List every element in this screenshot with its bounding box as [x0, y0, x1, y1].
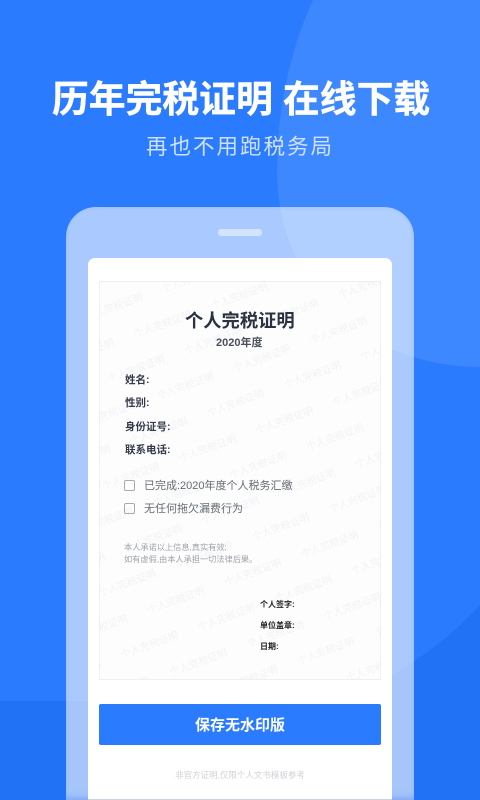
pledge text: 如有虚假,由本人承担一切法律后果。: [124, 554, 257, 564]
pledge text: 本人承诺以上信息,真实有效;: [124, 543, 227, 552]
save button: [99, 704, 381, 745]
pledge text: [124, 543, 257, 564]
subtitle: 再也不用跑税务局: [146, 135, 334, 159]
phone frame: [66, 207, 414, 800]
checkbox 2: [124, 503, 135, 514]
title: 历年完税证明 在线下载: [52, 79, 430, 120]
document title: 个人完税证明: [185, 310, 295, 331]
stamp label: 单位盖章:: [260, 621, 295, 630]
checkbox 1 label: 已完成:2020年度个人税务汇缴: [144, 480, 293, 492]
certificate document: [99, 281, 381, 680]
document year: 2020年度: [216, 337, 262, 349]
signature label: 个人签字:: [260, 600, 295, 609]
date label: 日期:: [260, 642, 279, 651]
phone screen: [88, 258, 392, 799]
disclaimer: 非官方证明,仅限个人文书模板参考: [175, 770, 305, 780]
field: name: 姓名:: [125, 374, 150, 386]
field: phone: 联系电话:: [125, 444, 170, 456]
checkbox 2 label: 无任何拖欠漏费行为: [144, 503, 243, 515]
field: gender: 性别:: [125, 397, 150, 409]
save button: 保存无水印版: [195, 717, 285, 734]
checkbox 1: [124, 480, 135, 491]
field: id number: 身份证号:: [125, 421, 170, 433]
phone speaker: [218, 229, 262, 236]
